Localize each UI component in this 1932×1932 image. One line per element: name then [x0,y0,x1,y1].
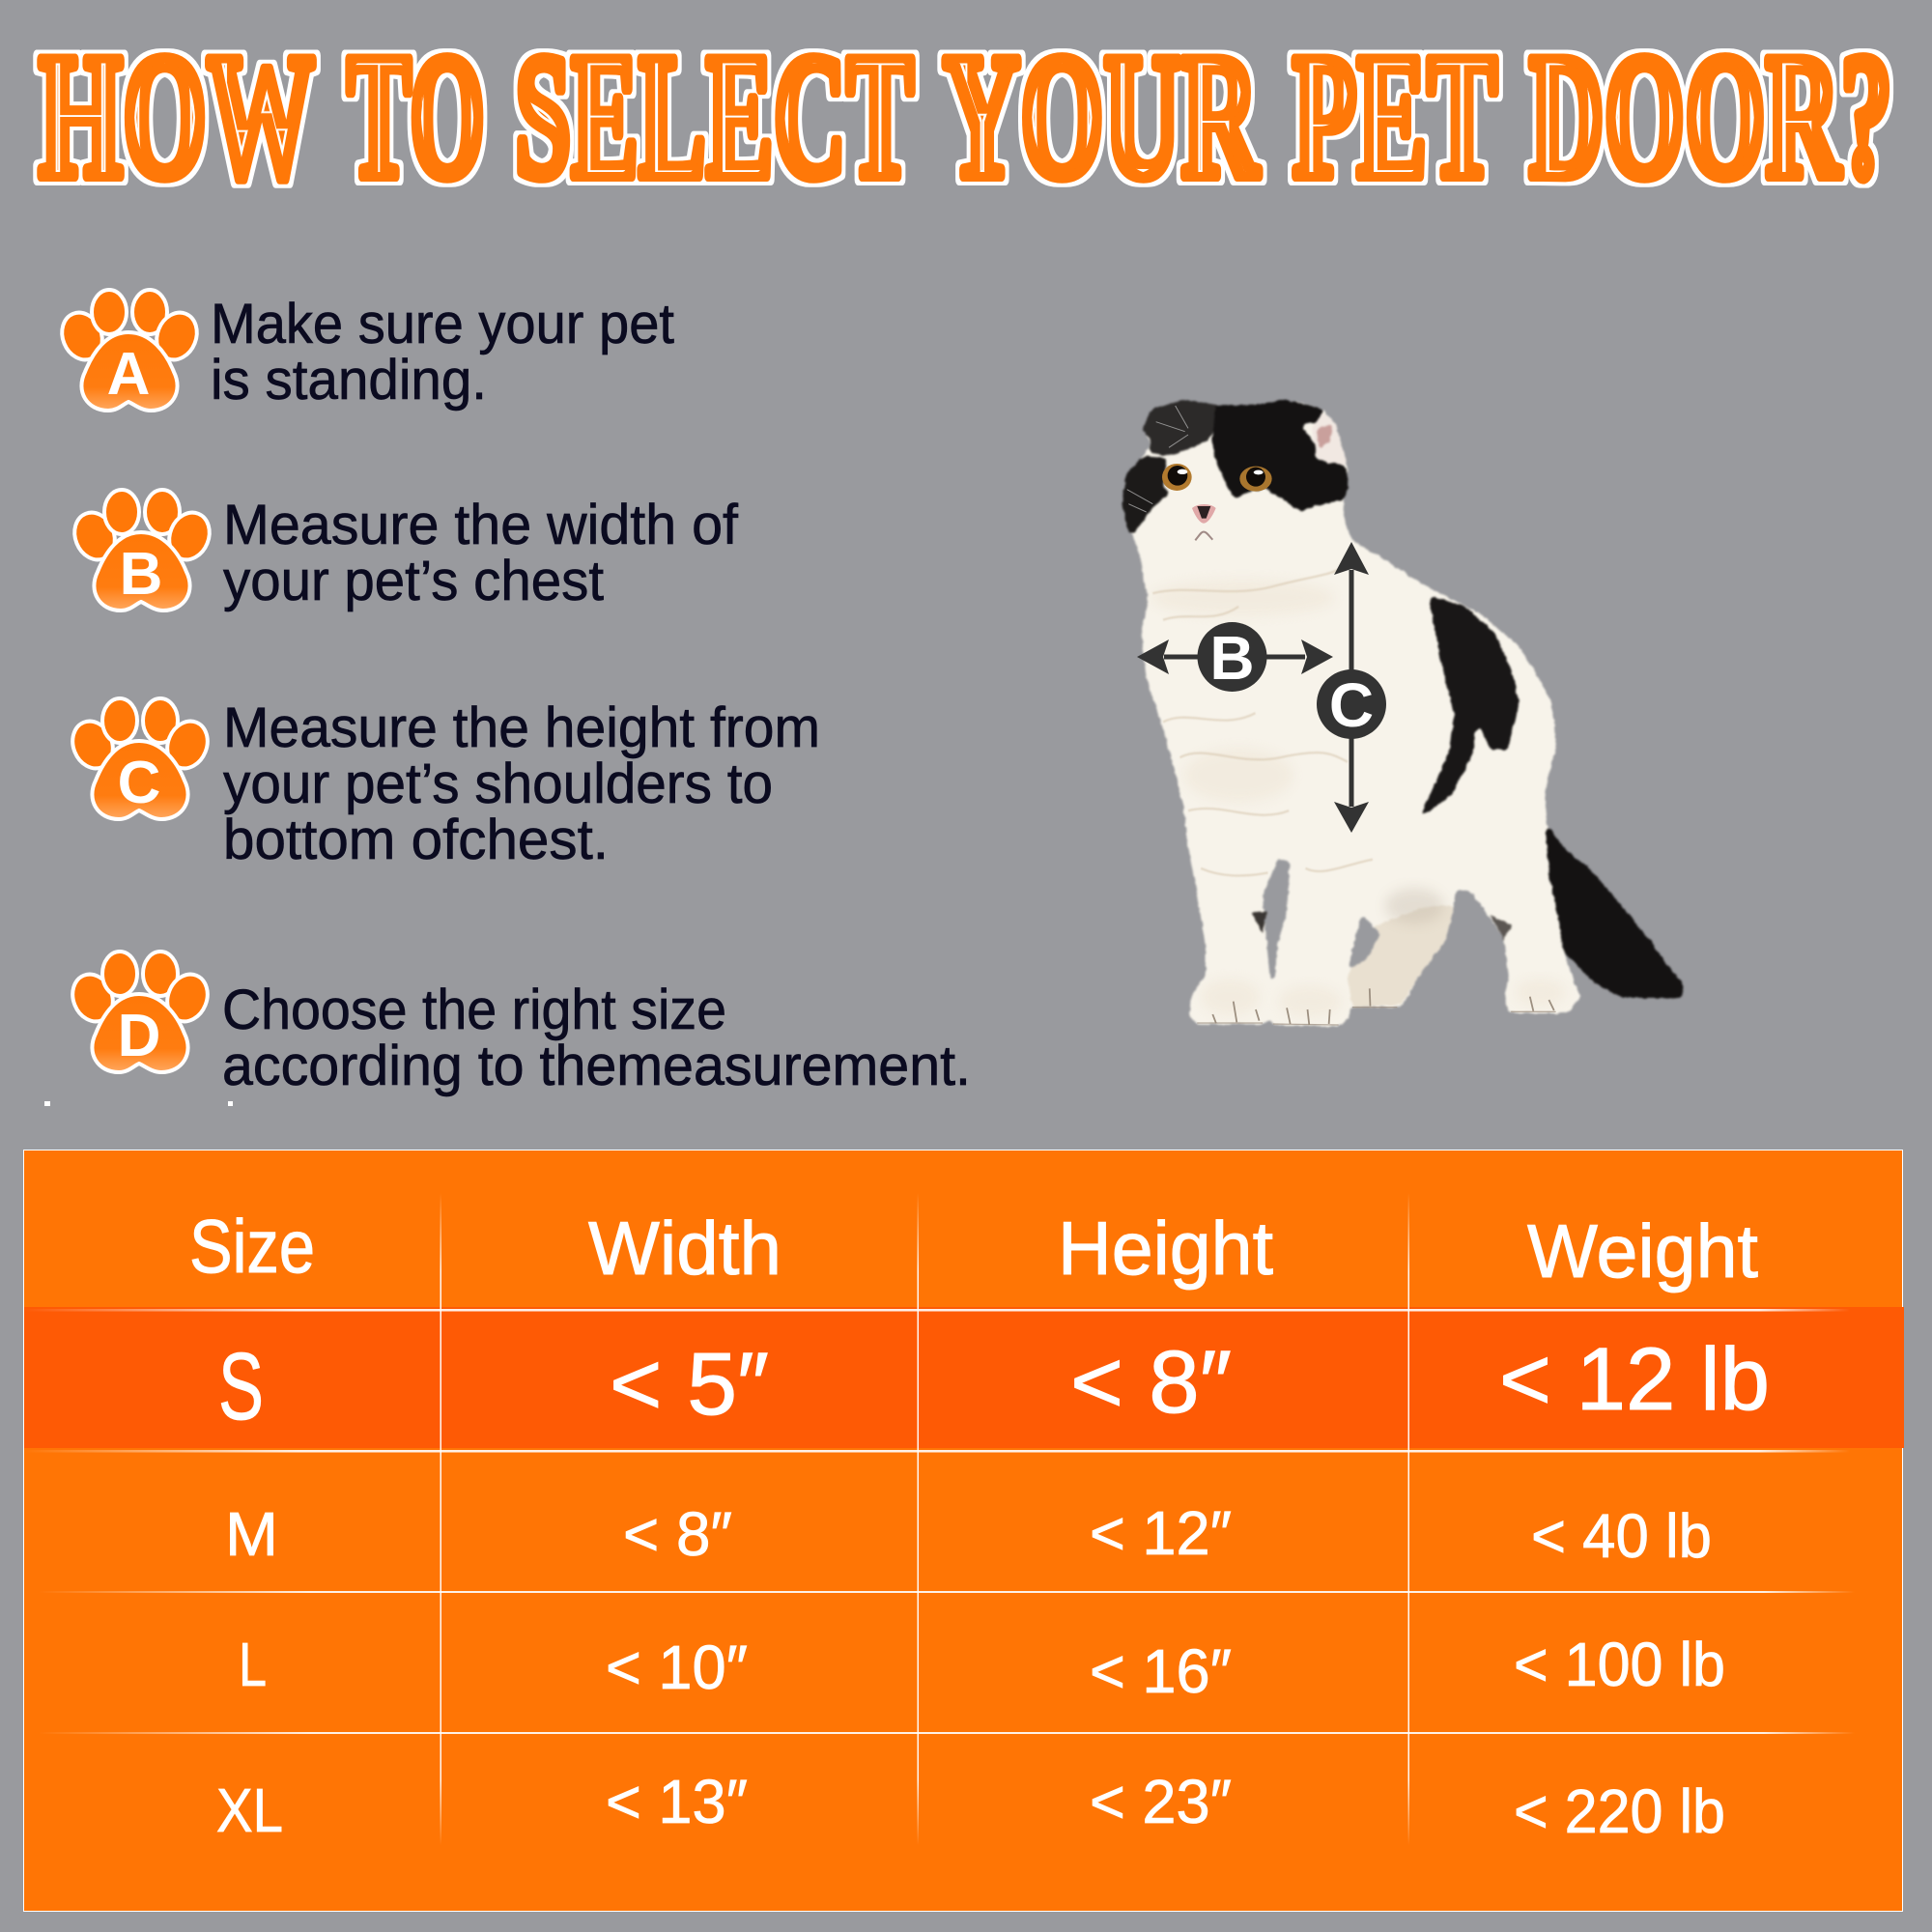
text: step B [223,494,739,612]
text: step A: Make sure your pet [211,293,674,355]
arrow B: B [1209,623,1255,693]
row XL: < 220 lb [1514,1776,1725,1846]
icon: paw B [68,490,216,611]
row L: < 100 lb [1514,1630,1725,1699]
icon: paw C: C [118,750,160,816]
pink inner ear [1317,425,1333,449]
arrow C: C [1329,670,1374,740]
row XL: XL [216,1776,283,1845]
text: step C: bottom ofchest. [223,809,609,871]
text: step A [211,293,674,412]
row XL: < 23″ [1090,1767,1232,1836]
table header [189,1204,1758,1293]
row M: < 8″ [623,1499,732,1569]
row L: < 10″ [606,1633,748,1702]
text: step D: according to themeasurement. [222,1035,971,1097]
text: step C: your pet’s shoulders to [223,753,773,815]
title: SELECT [515,17,914,214]
step C [66,696,820,871]
title: YOUR [943,17,1260,214]
row S: < 5″ [610,1335,769,1434]
text: step C [223,696,820,871]
row L [239,1630,1725,1706]
row XL [216,1767,1725,1846]
table header: Weight [1527,1208,1758,1293]
grid lines [24,1193,1855,1845]
step B [68,490,739,612]
cat photo [1122,400,1684,1026]
black forehead patch [1212,400,1349,511]
gap between front and hind leg [1349,915,1379,970]
black left eye patch [1122,457,1169,535]
row M [225,1498,1712,1571]
pale ear [1312,412,1348,467]
table header: Height [1058,1206,1273,1291]
toes [1197,988,1556,1025]
cat shading [1151,580,1565,1017]
text: step D [222,979,971,1097]
arrow C [1317,542,1386,833]
step A [55,290,674,412]
face details [1127,406,1272,540]
icon: paw D: D [118,1003,160,1069]
row S: S [218,1333,264,1439]
row M: < 40 lb [1531,1501,1712,1571]
row M: M [225,1499,278,1569]
title [39,17,1892,214]
text: step A: is standing. [211,349,487,412]
title: TO [347,17,485,214]
illustration: cat with measurement arrows [1122,400,1684,1026]
dark left ear [1142,400,1222,456]
row L: L [239,1630,267,1699]
step D [66,952,971,1097]
row S: < 8″ [1070,1333,1232,1432]
size table [23,1150,1904,1911]
text: step B: Measure the width of [223,494,739,556]
tail [1546,824,1684,998]
gap between front legs [1263,858,1290,980]
back patch [1419,595,1520,819]
text: step D: Choose the right size [222,979,726,1041]
icon: paw B: B [120,541,162,608]
cat silhouette and markings [1122,400,1684,1026]
fur wrinkles [1152,567,1373,876]
text: step C: Measure the height from [223,696,820,759]
row S [218,1330,1770,1439]
row S: < 12 lb [1499,1330,1770,1429]
row M: < 12″ [1090,1498,1232,1568]
icon: paw A [55,290,204,411]
arrow B [1137,622,1333,693]
icon: paw C [66,698,214,819]
hind leg shade [1348,905,1454,1008]
table panel [23,1150,1903,1911]
table header: Size [189,1204,315,1289]
icon: paw D [66,952,214,1072]
leg spots [1252,911,1266,934]
highlighted row S [24,1307,1904,1448]
title: PET [1293,17,1497,214]
icon: paw A: A [107,341,150,408]
row L: < 16″ [1090,1636,1232,1706]
title: HOW [39,17,315,214]
table header: Width [588,1206,781,1291]
text: step B: your pet’s chest [223,550,604,612]
row XL: < 13″ [606,1767,748,1836]
